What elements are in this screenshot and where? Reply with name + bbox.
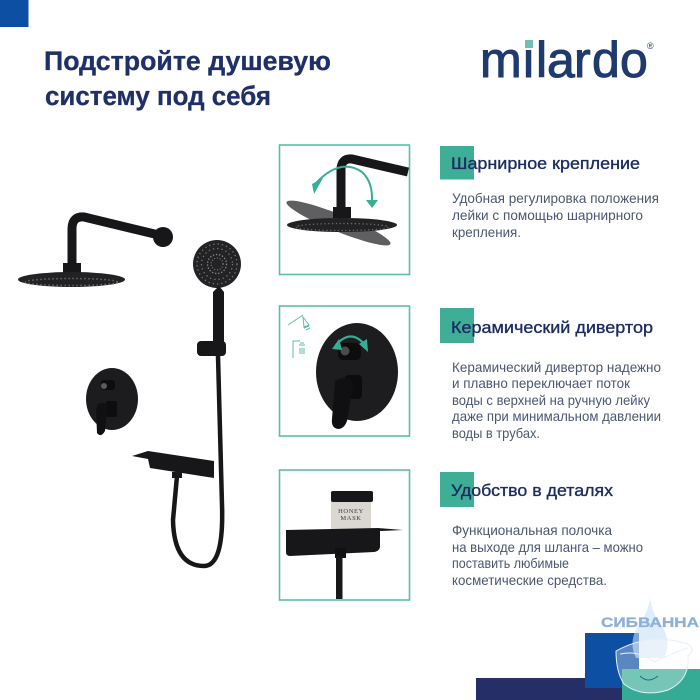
tilted shower head xyxy=(283,194,394,252)
rotation arrow xyxy=(332,336,368,352)
cosmetic jar: HONEY xyxy=(338,508,364,515)
logo: milardo: milardo xyxy=(480,32,648,88)
description: на выходе для шланга – можно xyxy=(452,539,643,555)
description: крепления. xyxy=(452,224,521,240)
heading: Шарнирное крепление xyxy=(451,154,640,173)
description: Функциональная полочка xyxy=(452,522,612,538)
title xyxy=(44,46,331,111)
description: лейки с помощью шарнирного xyxy=(452,207,643,223)
description: Удобная регулировка положения xyxy=(452,190,659,206)
hose xyxy=(335,548,346,599)
bathtub xyxy=(616,639,692,693)
diverter knob xyxy=(338,343,361,360)
description: Керамический дивертор надежно xyxy=(452,359,661,375)
mixer plate xyxy=(316,323,398,421)
hose xyxy=(173,356,222,566)
description: косметические средства. xyxy=(452,572,607,588)
product illustration: full shower set xyxy=(18,217,241,566)
shower head xyxy=(287,218,397,232)
decorative corner blocks xyxy=(476,633,700,700)
icon: hand shower xyxy=(293,341,305,358)
description xyxy=(452,359,661,441)
description: воды с верхней на ручную лейку xyxy=(452,392,650,408)
accent square xyxy=(440,146,474,180)
shower arm xyxy=(341,159,408,208)
description xyxy=(452,190,659,240)
icon: overhead shower xyxy=(288,315,310,330)
text block: ceramic diverter xyxy=(440,308,661,441)
description: воды в трубах. xyxy=(452,425,540,441)
panel: shelf details xyxy=(280,470,410,600)
text block: shelf details xyxy=(440,472,643,588)
corner accent square xyxy=(0,0,28,27)
panel: swivel joint xyxy=(280,145,410,274)
rotation arrow xyxy=(312,167,378,208)
title: систему под себя xyxy=(45,81,271,111)
heading: Удобство в деталях xyxy=(451,481,614,500)
hose shelf outlet xyxy=(132,451,214,478)
description: даже при минимальном давлении xyxy=(452,408,661,424)
rain shower head with arm xyxy=(18,217,173,287)
logo: milardo: ® xyxy=(647,41,654,51)
accent square xyxy=(440,472,474,507)
text block: swivel joint xyxy=(440,146,659,240)
hand shower xyxy=(193,240,241,356)
heading: Керамический дивертор xyxy=(451,318,653,337)
shelf xyxy=(286,528,403,556)
title: Подстройте душевую xyxy=(44,46,331,76)
panel: ceramic diverter xyxy=(280,306,410,436)
water drop xyxy=(632,597,668,658)
cosmetic jar xyxy=(331,491,373,530)
accent square xyxy=(440,308,474,343)
description: поставить любимые xyxy=(452,555,569,571)
description xyxy=(452,522,643,588)
watermark: sibvanna xyxy=(601,597,699,693)
watermark text: СИБВАННА xyxy=(601,614,699,630)
diverter mixer xyxy=(86,368,138,435)
description: и плавно переключает поток xyxy=(452,375,631,391)
cosmetic jar: MASK xyxy=(340,515,362,522)
lever handle xyxy=(332,375,362,429)
